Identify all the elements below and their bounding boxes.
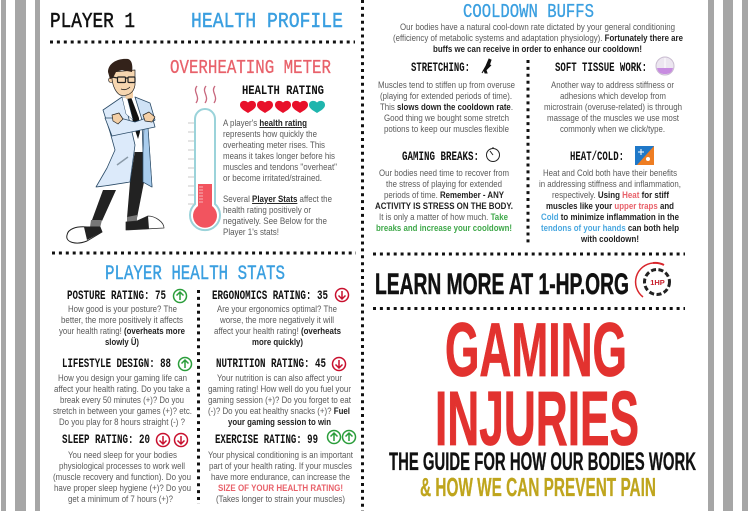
stat: posture rating: better, the more positively it affects: [61, 315, 183, 326]
buff: soft tissue work: Another way to address stiffness or: [551, 80, 675, 91]
icon: 1hp logo: [636, 263, 670, 297]
stat: sleep rating: SLEEP RATING: 20: [62, 433, 150, 447]
buff: stretching: [378, 59, 515, 135]
buff: stretching: STRETCHING:: [411, 61, 470, 75]
stat: exercise rating: [208, 430, 356, 505]
icon: heat squiggles: [195, 86, 216, 103]
buff: soft tissue work: microstrain (overuse-related) is through: [544, 102, 682, 113]
buff: soft tissue work: adhesions which develop from: [560, 91, 666, 102]
buff: soft tissue work: massage of the muscles we use most: [547, 113, 679, 124]
stat: lifestyle design: How you design your gaming life can: [58, 373, 187, 384]
stat: posture rating: POSTURE RATING: 75: [67, 289, 166, 303]
text: health rating explanation: negatively. See Below for the: [223, 216, 327, 227]
stat: nutrition rating: gaming session (+)? Do you forget to eat: [208, 395, 351, 406]
text: health rating explanation: A player's health rating: [223, 118, 307, 129]
stat: nutrition rating: (-)? Do you eat healthy snacks (+)? Fuel: [208, 406, 350, 417]
buff: gaming breaks: breaks and increase your cooldown!: [376, 223, 512, 234]
stat: nutrition rating: your gaming session to win: [228, 417, 331, 428]
text: health rating explanation: or become irritated/strained.: [223, 173, 322, 184]
buff: gaming breaks: [375, 147, 513, 234]
buff: heat/cold: Heat and Cold both have their benefits: [543, 168, 677, 179]
stat: ergonomics rating: more quickly): [252, 337, 303, 348]
stat: exercise rating: Your physical conditioning is an important: [208, 450, 353, 461]
heading: health rating: HEALTH RATING: [242, 84, 324, 98]
stat: exercise rating: have more endurance, can increase the: [211, 472, 350, 483]
heading: player 1: PLAYER 1: [50, 11, 135, 34]
stat: nutrition rating: gaming rating! How well do you fuel your: [208, 384, 352, 395]
stat: ergonomics rating: ERGONOMICS RATING: 35: [212, 289, 328, 303]
stat: posture rating: How good is your posture? The: [68, 304, 177, 315]
buff: gaming breaks: ACTIVITY IS STRESS ON THE BODY.: [375, 201, 513, 212]
stat: posture rating: your health rating! (overheats more: [59, 326, 185, 337]
buff: heat/cold: in addressing stiffness and inflammation,: [539, 179, 681, 190]
stat: lifestyle design: affect your health rating. Do you take a: [54, 384, 191, 395]
buff: gaming breaks: periods of time. Remember - ANY: [384, 190, 504, 201]
stat: lifestyle design: [53, 357, 192, 428]
stat: sleep rating: have proper sleep hygiene (+)? Do you: [54, 483, 191, 494]
heading: cooldown buffs: COOLDOWN BUFFS: [463, 1, 594, 23]
buff: heat/cold: Cold to minimize inflammation in the: [541, 212, 679, 223]
buff: stretching: Good thing we bought some stretch: [384, 113, 509, 124]
panel: player 1 health profile: [50, 11, 343, 243]
stat: lifestyle design: break every 50 minutes (+)? Do you: [60, 395, 184, 406]
stat: exercise rating: (Takes longer to strain your muscles): [216, 494, 345, 505]
stat: lifestyle design: stretch in between your games (+)? etc.: [53, 406, 192, 417]
text: health rating explanation: means it takes longer before his: [223, 151, 335, 162]
stat: ergonomics rating: worse, the more negatively it will: [219, 315, 334, 326]
text: health rating explanation: Several Player Stats affect the: [223, 194, 332, 205]
heading: health profile: HEALTH PROFILE: [191, 11, 343, 34]
chart: thermometer: [188, 109, 220, 230]
text: health rating explanation: overheating meter rises. This: [223, 140, 325, 151]
buff: stretching: Muscles tend to stiffen up from overuse: [378, 80, 515, 91]
stat: lifestyle design: Do you play for 8 hours straight (-) ?: [59, 417, 185, 428]
stat: sleep rating: get a minimum of 7 hours (+)?: [68, 494, 173, 505]
text: cooldown intro: buffs we can receive in order to enhance our cooldown!: [433, 44, 642, 55]
stat: nutrition rating: Your nutrition is can also affect your: [217, 373, 343, 384]
buff: soft tissue work: [544, 57, 682, 135]
buff: soft tissue work: SOFT TISSUE WORK:: [555, 61, 647, 75]
stat: sleep rating: You need sleep for your bodies: [68, 450, 177, 461]
stat: sleep rating: (muscle recovery and function). Do you: [53, 472, 191, 483]
buff: heat/cold: tendons of your hands can both help: [541, 223, 679, 234]
heading: overheating meter: OVERHEATING METER: [170, 57, 331, 79]
text: health rating explanation: health rating positively or: [223, 205, 312, 216]
buff: stretching: This slows down the cooldown rate.: [380, 102, 513, 113]
buff: heat/cold: muscles like your upper traps and: [546, 201, 674, 212]
stat: lifestyle design: LIFESTYLE DESIGN: 88: [62, 357, 171, 371]
stat: sleep rating: [53, 433, 191, 505]
buff: stretching: potions to keep our muscles flexible: [384, 124, 509, 135]
title: gaming injuries: [435, 308, 639, 462]
illustration: doctor character: [67, 59, 164, 243]
text: health rating explanation: [223, 118, 337, 238]
panel: cooldown buffs: [375, 1, 683, 245]
text: health rating explanation: Player 1's stats!: [223, 227, 279, 238]
buff: heat/cold: HEAT/COLD:: [570, 150, 624, 164]
text: health rating explanation: represents how quickly the: [223, 129, 317, 140]
stat: sleep rating: physiological processes to work well: [59, 461, 185, 472]
stat: ergonomics rating: Are your ergonomics optimal? The: [217, 304, 337, 315]
stat: nutrition rating: NUTRITION RATING: 45: [216, 357, 326, 371]
icon: heart rating: [240, 101, 325, 113]
buff: gaming breaks: Our bodies need time to recover from: [379, 168, 509, 179]
text: cooldown intro: (efficiency of metabolic systems and adaptation physiology). Fortunately there are: [393, 33, 683, 44]
buff: soft tissue work: commonly when we click/type.: [560, 124, 665, 135]
stat: exercise rating: SIZE OF YOUR HEALTH RATING!: [218, 483, 343, 494]
buff: stretching: (playing for extended periods of time).: [380, 91, 512, 102]
buff: heat/cold: [539, 146, 681, 245]
stat: exercise rating: part of your health rating. If your muscles: [209, 461, 352, 472]
stat: ergonomics rating: affect your health rating! (overheats: [214, 326, 341, 337]
text: health rating explanation: muscles and tendons "overheat": [223, 162, 337, 173]
icon: 1hp logo: 1HP: [650, 278, 665, 287]
panel: player health stats: [53, 263, 356, 505]
stat: nutrition rating: [208, 357, 352, 428]
stat: exercise rating: EXERCISE RATING: 99: [215, 433, 318, 447]
buff: gaming breaks: the stress of playing for extended: [386, 179, 502, 190]
stat: posture rating: slowly Ü): [105, 337, 139, 348]
stat: ergonomics rating: [212, 288, 348, 348]
text: cooldown intro: [393, 22, 683, 55]
text: cooldown intro: Our bodies have a natural cool-down rate dictated by your general conditioning: [400, 22, 675, 33]
buff: heat/cold: with cooldown!: [580, 234, 639, 245]
buff: gaming breaks: GAMING BREAKS:: [402, 150, 479, 164]
buff: heat/cold: respectively. Using Heat for stiff: [552, 190, 670, 201]
stat: posture rating: [59, 289, 186, 348]
heading: player health stats: PLAYER HEALTH STATS: [105, 263, 285, 286]
buff: gaming breaks: It is only a matter of how much. Take: [379, 212, 508, 223]
